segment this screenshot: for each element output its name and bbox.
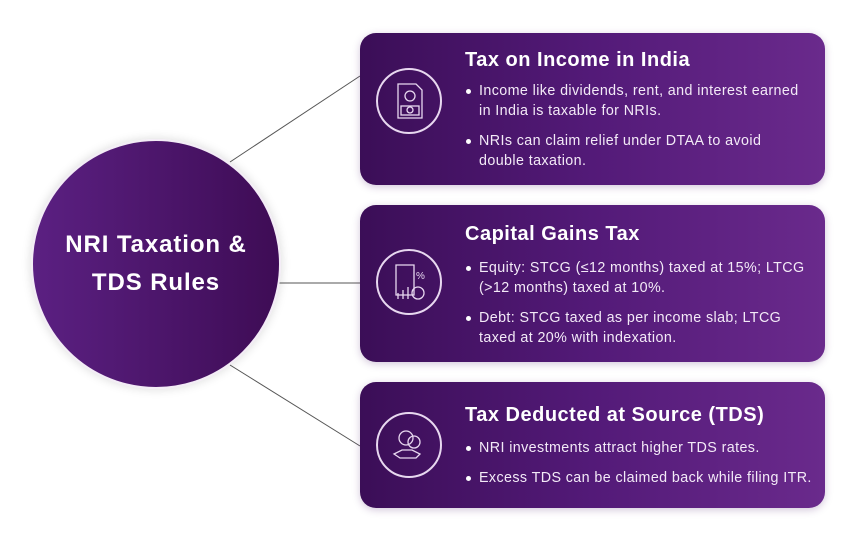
panel: tax on income: NRIs can claim relief under DTAA to avoid double taxation. <box>479 133 761 169</box>
panel: TDS: Tax Deducted at Source (TDS) <box>465 404 764 426</box>
panel: capital gains <box>360 205 825 362</box>
panel: TDS <box>360 382 825 508</box>
icon: chart <box>376 249 442 315</box>
panel: TDS: Excess TDS can be claimed back while filing ITR. <box>479 470 812 486</box>
central circle <box>31 139 281 389</box>
panel: tax on income <box>360 33 825 185</box>
icon: hand coins <box>376 412 442 478</box>
icon: chart: % <box>416 271 425 282</box>
panel: capital gains: Debt: STCG taxed as per income slab; LTCG taxed at 20% with indexation. <box>479 310 781 346</box>
panel: tax on income: Income like dividends, rent, and interest earned in India is taxable for NRIs. <box>479 83 799 119</box>
panel: TDS: NRI investments attract higher TDS rates. <box>479 440 760 456</box>
panel: tax on income: Tax on Income in India <box>465 49 690 71</box>
central circle: NRI Taxation & <box>65 231 247 258</box>
icon: document <box>376 68 442 134</box>
panel: capital gains: Capital Gains Tax <box>465 223 640 245</box>
panel: capital gains: Equity: STCG (≤12 months) taxed at 15%; LTCG (>12 months) taxed at 10%. <box>479 260 805 296</box>
central circle: TDS Rules <box>92 269 220 296</box>
